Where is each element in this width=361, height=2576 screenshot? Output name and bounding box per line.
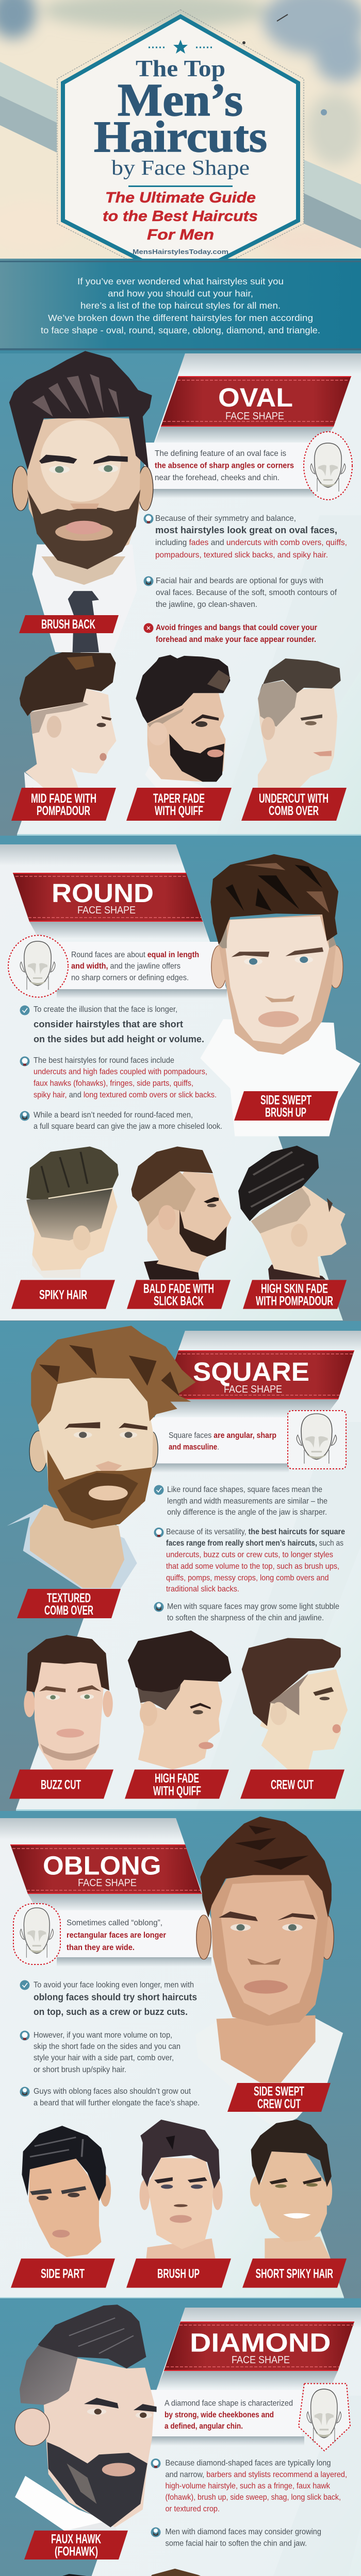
- oblong: bullet short haircuts: oblong faces should try short haircuts: [34, 1992, 197, 2003]
- oblong: bullet short haircuts: To avoid your face looking even longer, men with: [34, 1980, 194, 1990]
- square: hairstyle labels: [9, 1770, 344, 1799]
- diamond: background: [0, 2298, 361, 2576]
- intro text: to face shape - oval, round, square, oblong, diamond, and triangle.: [41, 325, 320, 335]
- oblong: light panel: [0, 1818, 344, 2299]
- illustration: slick back: [140, 2569, 230, 2576]
- oval: bullet facial hair: oval faces. Because of the soft, smooth contours of: [156, 588, 337, 597]
- diamond: face outline icon: [299, 2383, 350, 2451]
- diamond: bullet layered: Because diamond-shaped faces are typically long: [165, 2459, 331, 2468]
- diamond: bullet layered: (fohawk), brush up, side sweep, shag, long slick back,: [165, 2493, 341, 2502]
- oval: bullet facial hair: the jawline, go clean-shaven.: [156, 600, 257, 609]
- oval: definition text: near the forehead, cheeks and chin.: [155, 473, 280, 482]
- round: definition text: [71, 951, 199, 982]
- oval: bullet avoid: Avoid fringes and bangs that could cover your: [156, 623, 317, 632]
- oval: bullet most hairstyles: Because of their symmetry and balance,: [155, 514, 296, 523]
- oval: label brush back: [19, 615, 119, 633]
- illustration: short spiky hair: [250, 2120, 332, 2258]
- oval: label brush back: BRUSH BACK: [41, 617, 95, 632]
- oval: ribbon sub-heading: FACE SHAPE: [225, 411, 284, 422]
- oblong: bullet beard: [20, 2087, 200, 2107]
- hero: stained paper background: [0, 0, 361, 259]
- illustration: mid fade with pompadour: [20, 652, 116, 788]
- round: ribbon heading: ROUND: [52, 878, 154, 908]
- intro text: If you’ve ever wondered what hairstyles suit you: [77, 276, 284, 286]
- subtitle: [103, 190, 258, 243]
- title: The Top: [136, 55, 225, 81]
- oblong: bullet volume: style your hair with a side part, comb over,: [34, 2054, 174, 2062]
- illustration: high fade with quiff: [128, 1631, 232, 1770]
- round: bullet beard: a full square beard can give the jaw a more chiseled look.: [34, 1122, 222, 1131]
- square: definition text: and masculine.: [169, 1443, 219, 1452]
- oval: definition text: the absence of sharp angles or corners: [155, 462, 294, 470]
- round: bullet best hairstyles: faux hawks (fohawks), fringes, side parts, quiffs,: [34, 1079, 193, 1088]
- illustration: brush up: [140, 2120, 223, 2258]
- oval: bullet facial hair: [143, 576, 337, 609]
- diamond: ribbon sub-heading: FACE SHAPE: [232, 2354, 290, 2366]
- round: bullet best hairstyles: spiky hair, and long textured comb overs or slick backs.: [34, 1091, 217, 1099]
- square: hairstyle labels: BUZZ CUT: [41, 1777, 81, 1792]
- diamond: label faux hawk: FAUX HAWK: [51, 2532, 101, 2546]
- title: Men’s: [118, 75, 243, 126]
- oblong: bullet beard: Guys with oblong faces also shouldn’t grow out: [34, 2087, 191, 2096]
- oval: face outline icon: [304, 432, 352, 500]
- oval: hairstyle labels: MID FADE WITH: [31, 791, 96, 806]
- oval: definition card: [144, 432, 352, 500]
- oval: ribbon: [155, 376, 351, 443]
- round: background: [0, 836, 361, 1321]
- intro text: We’ve broken down the different hairstyles for men according: [48, 313, 313, 323]
- oblong: bullet short haircuts: on top, such as a crew or buzz cuts.: [34, 2007, 188, 2017]
- oblong: bullet beard: a beard that will further elongate the face’s shape.: [34, 2099, 200, 2107]
- oblong: label side swept crew cut: [227, 2083, 331, 2112]
- round: bullet best hairstyles: undercuts and high fades coupled with pompadours,: [34, 1067, 207, 1076]
- round: definition text: Round faces are about equal in length: [71, 951, 199, 959]
- oval: background: [0, 353, 361, 836]
- round: bullet illusion: [20, 1005, 204, 1044]
- oval: bullet avoid: forehead and make your face appear rounder.: [156, 635, 316, 644]
- diamond: label faux hawk: [24, 2531, 128, 2560]
- illustration: faux hawk: [15, 2304, 157, 2531]
- oblong: ribbon heading: OBLONG: [43, 1851, 161, 1880]
- square: hairstyle labels: CREW CUT: [271, 1777, 314, 1792]
- oblong: definition text: Sometimes called “oblong”,: [67, 1919, 162, 1927]
- illustration: high skin fade with pompadour: [238, 1146, 347, 1280]
- round: hairstyle labels: [11, 1280, 347, 1309]
- diamond: definition text: a defined, angular chin.: [165, 2422, 243, 2431]
- hero: rule: [128, 185, 233, 187]
- round: hairstyle labels: SLICK BACK: [154, 1294, 204, 1309]
- square: light panel: [16, 1331, 361, 1811]
- illustration: undercut with comb over: [258, 658, 341, 788]
- oblong: hairstyle labels: SIDE PART: [41, 2267, 85, 2281]
- round: bullet illusion: on the sides but add height or volume.: [34, 1034, 204, 1044]
- square: bullet stubble: to soften the sharpness of the chin and jawline.: [167, 1614, 324, 1622]
- illustration: textured comb over: [7, 1326, 195, 1590]
- oblong: definition text: than they are wide.: [67, 1943, 135, 1952]
- oblong: background: [0, 1811, 361, 2298]
- subtitle: The Ultimate Guide: [105, 190, 256, 206]
- round: bullet beard: [20, 1111, 222, 1131]
- square: ribbon sub-heading: FACE SHAPE: [224, 1384, 282, 1395]
- title: by Face Shape: [111, 156, 250, 179]
- oblong: hairstyle labels: [11, 2259, 347, 2287]
- diamond: bullet layered: high-volume hairstyle, such as a fringe, faux hawk: [165, 2482, 331, 2490]
- section: diamond: [0, 2298, 361, 2576]
- hero: diagonal stripes: [0, 62, 361, 248]
- square: definition text: [169, 1431, 276, 1452]
- oval: bullet most hairstyles: [143, 514, 347, 560]
- square: bullet best haircuts: undercuts, buzz cuts or crew cuts, to longer styles: [166, 1551, 333, 1560]
- diamond: definition card: [147, 2383, 350, 2451]
- square: ribbon: [155, 1350, 354, 1417]
- hero: title area: [0, 0, 361, 286]
- round: ribbon: [13, 873, 209, 939]
- diamond: ribbon heading: DIAMOND: [190, 2328, 331, 2358]
- oval: hairstyle labels: WITH QUIFF: [155, 804, 203, 818]
- round: bullet best hairstyles: [20, 1056, 217, 1099]
- subtitle: For Men: [147, 227, 214, 243]
- round: face outline icon: [8, 936, 68, 997]
- diamond: light panel: [17, 2308, 361, 2576]
- diamond: bullet layered: and narrow, barbers and stylists recommend a layered,: [165, 2470, 347, 2479]
- illustration: side swept brush up: [200, 854, 360, 1136]
- round: bullet illusion: consider hairstyles that are short: [34, 1019, 183, 1029]
- square: bullet best haircuts: [154, 1528, 345, 1594]
- oblong: bullet volume: However, if you want more volume on top,: [34, 2031, 172, 2040]
- square: bullet best haircuts: that add some volume to the top, such as brush ups,: [166, 1562, 339, 1571]
- square: bullet stubble: [154, 1602, 339, 1622]
- oblong: bullet short haircuts: [20, 1980, 197, 2017]
- round: definition text: and width, and the jawline offers: [71, 962, 180, 971]
- title: [94, 55, 267, 179]
- diamond: bullet facial hair: Men with diamond faces may consider growing: [165, 2528, 321, 2536]
- round: label side swept brush up: [234, 1091, 338, 1121]
- square: background: [0, 1321, 361, 1811]
- round: definition text: no sharp corners or defining edges.: [71, 974, 189, 982]
- round: bullet illusion: To create the illusion that the face is longer,: [34, 1005, 177, 1014]
- square: definition card: [147, 1411, 346, 1472]
- round: ribbon sub-heading: FACE SHAPE: [77, 905, 136, 916]
- intro text: and how you should cut your hair,: [108, 289, 253, 299]
- square: label textured comb over: [17, 1589, 121, 1618]
- oval: bullet most hairstyles: including fades and undercuts with comb overs, quiffs,: [155, 538, 347, 547]
- oblong: hairstyle labels: BRUSH UP: [157, 2267, 200, 2281]
- square: ribbon heading: SQUARE: [193, 1357, 309, 1386]
- subtitle: to the Best Haircuts: [103, 208, 258, 225]
- illustration: buzz cut: [24, 1635, 113, 1770]
- diamond: definition text: [165, 2399, 293, 2431]
- section: square: [0, 1321, 361, 1811]
- round: hairstyle labels: BALD FADE WITH: [143, 1282, 214, 1296]
- oblong: definition text: [67, 1919, 166, 1952]
- illustration: taper fade with quiff: [136, 655, 230, 788]
- round: label side swept brush up: SIDE SWEPT: [260, 1093, 311, 1108]
- oval: bullet avoid: [143, 623, 317, 644]
- title: Haircuts: [94, 112, 267, 161]
- diamond: bullet facial hair: some facial hair to soften the chin and jaw.: [165, 2539, 307, 2548]
- square: label textured comb over: COMB OVER: [44, 1603, 93, 1618]
- square: bullet best haircuts: traditional slick backs.: [166, 1585, 239, 1594]
- oblong: ribbon: [10, 1844, 208, 1910]
- hero: site url: MensHairstylesToday.com: [133, 248, 228, 256]
- square: bullet best haircuts: faces range from really short men’s haircuts, such as: [166, 1539, 343, 1548]
- oval: bullet most hairstyles: pompadours, textured slick backs, and spiky hair.: [155, 551, 328, 560]
- illustration: spiky hair: [26, 1146, 119, 1278]
- oval: bullet facial hair: Facial hair and beards are optional for guys with: [156, 577, 323, 585]
- diamond: definition text: by strong, wide cheekbones and: [165, 2411, 274, 2419]
- oval: definition text: The defining feature of an oval face is: [155, 449, 286, 458]
- oval: hairstyle labels: TAPER FADE: [153, 791, 205, 806]
- oval: hairstyle labels: [11, 788, 347, 821]
- square: bullet measurements: only difference is the angle of the jaw is sharper.: [167, 1508, 327, 1517]
- illustration: side swept crew cut: [195, 1817, 343, 2129]
- intro text: here’s a list of the top haircut styles for all men.: [80, 300, 281, 311]
- diamond: definition text: A diamond face shape is characterized: [165, 2399, 293, 2408]
- round: light panel: [0, 844, 343, 1320]
- square: bullet measurements: length and width measurements are similar – the: [167, 1497, 327, 1506]
- hero: star and dots: [149, 40, 213, 54]
- square: bullet measurements: [154, 1485, 327, 1517]
- hero: hexagon badge: [57, 10, 304, 286]
- oval: hairstyle labels: POMPADOUR: [37, 804, 90, 818]
- oblong: definition text: rectangular faces are longer: [67, 1931, 166, 1940]
- square: hairstyle labels: WITH QUIFF: [153, 1784, 201, 1798]
- section: round: [0, 836, 361, 1321]
- diamond: bullet layered: [151, 2459, 347, 2513]
- illustration: bald fade with slick back: [131, 1146, 232, 1280]
- square: bullet best haircuts: Because of its versatility, the best haircuts for square: [166, 1528, 345, 1536]
- illustration: brush back: [9, 351, 153, 652]
- illustration: textured crop: [26, 2574, 119, 2576]
- round: definition card: [8, 936, 227, 998]
- diamond: ribbon: [157, 2321, 354, 2388]
- square: definition text: Square faces are angular, sharp: [169, 1431, 276, 1440]
- intro band: [0, 259, 361, 353]
- square: bullet stubble: Men with square faces may grow some light stubble: [167, 1602, 339, 1611]
- oblong: label side swept crew cut: CREW CUT: [257, 2097, 301, 2111]
- square: face outline icon: [288, 1411, 346, 1469]
- oblong: ribbon sub-heading: FACE SHAPE: [78, 1877, 137, 1889]
- round: bullet beard: While a beard isn’t needed for round-faced men,: [34, 1111, 193, 1120]
- oblong: face outline icon: [13, 1904, 60, 1964]
- diamond: bullet facial hair: [151, 2528, 321, 2548]
- oblong: bullet volume: or short brush up/spiky hair.: [34, 2065, 126, 2074]
- oval: ribbon heading: OVAL: [218, 383, 293, 412]
- square: bullet best haircuts: quiffs, pomps, messy crops, long comb overs and: [166, 1573, 329, 1583]
- oblong: bullet volume: [20, 2031, 180, 2074]
- oval: light panel: [17, 353, 361, 836]
- round: hairstyle labels: SPIKY HAIR: [39, 1288, 87, 1302]
- diamond: label faux hawk: (FOHAWK): [55, 2545, 98, 2559]
- oval: definition text: [155, 449, 294, 482]
- round: bullet best hairstyles: The best hairstyles for round faces include: [34, 1056, 174, 1065]
- round: label side swept brush up: BRUSH UP: [265, 1106, 306, 1120]
- oblong: label side swept crew cut: SIDE SWEPT: [254, 2084, 304, 2099]
- oval: hairstyle labels: COMB OVER: [269, 804, 319, 818]
- oval: bullet most hairstyles: most hairstyles look great on oval faces,: [155, 525, 337, 535]
- intro text: [41, 276, 320, 335]
- square: label textured comb over: TEXTURED: [47, 1591, 91, 1605]
- illustration: crew cut profile: [242, 1638, 348, 1770]
- square: bullet measurements: Like round face shapes, square faces mean the: [167, 1485, 322, 1494]
- square: hairstyle labels: HIGH FADE: [155, 1771, 199, 1786]
- illustration: side part: [22, 2126, 111, 2257]
- diamond: bullet layered: or textured crop.: [165, 2505, 220, 2513]
- section: oval: [0, 351, 361, 836]
- section: oblong: [0, 1811, 361, 2299]
- oblong: definition card: [13, 1904, 211, 1967]
- oblong: bullet volume: skip the short fade on the sides and you can: [34, 2042, 180, 2051]
